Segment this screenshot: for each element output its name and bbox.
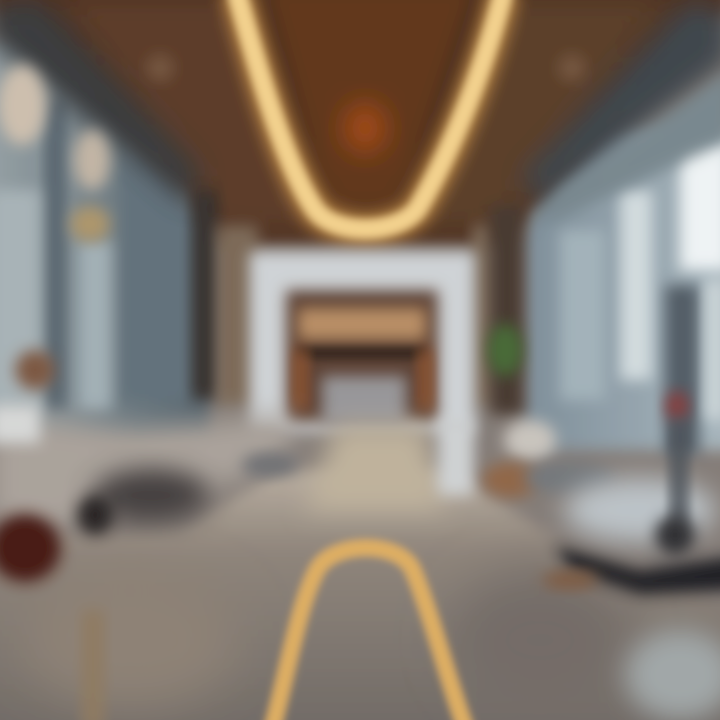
portal doorway bbox=[286, 290, 438, 426]
central white portal bbox=[250, 252, 474, 432]
right upper glass band bbox=[540, 70, 720, 225]
pendant lights on left bbox=[0, 65, 110, 242]
left ceiling beam bbox=[0, 0, 200, 205]
plant bbox=[487, 324, 523, 376]
left reflection streak bbox=[82, 610, 104, 720]
ceiling light loop bbox=[236, 0, 504, 229]
panel: ceiling bbox=[0, 0, 720, 245]
floor light reflection bbox=[272, 548, 466, 720]
panel: right glass wall bbox=[525, 130, 720, 455]
panel: left glass wall bbox=[0, 40, 210, 440]
right seating group bbox=[482, 391, 720, 595]
floor bbox=[0, 420, 720, 720]
back wall left bbox=[218, 225, 258, 405]
right ceiling beam bbox=[522, 0, 720, 205]
left seating group bbox=[0, 350, 298, 582]
left column bbox=[192, 190, 218, 400]
right column bbox=[490, 205, 524, 415]
back wall right bbox=[472, 225, 494, 405]
ceiling inner orange panel bbox=[270, 0, 470, 205]
